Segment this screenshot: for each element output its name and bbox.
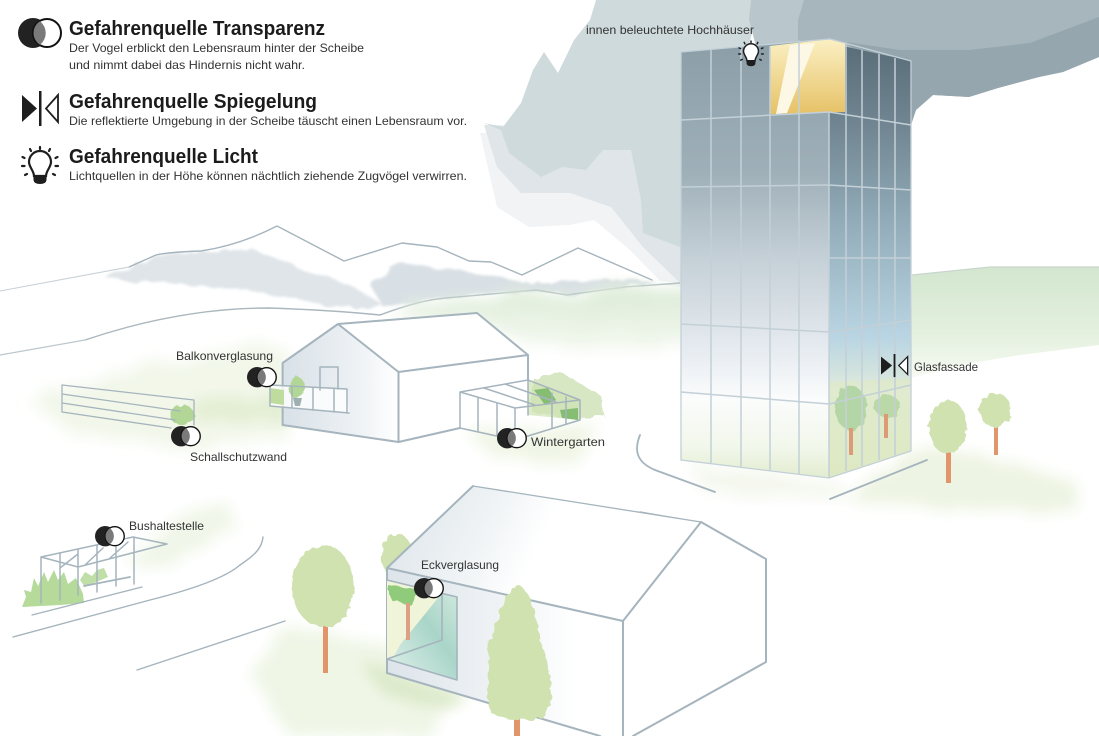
mountains	[0, 226, 680, 355]
roads	[13, 512, 697, 670]
text: Transparenz description	[69, 41, 364, 72]
reflection: lit top floor	[770, 39, 845, 114]
marker: Schallschutzwand	[171, 426, 287, 464]
marker: Wintergarten	[497, 428, 605, 449]
street lines at tower	[637, 435, 927, 499]
landscape: green watercolor patches	[30, 267, 1099, 736]
reflection: trees in facade	[829, 378, 911, 478]
house with balcony	[270, 313, 528, 442]
text: Transparenz description: Der Vogel erblickt den Lebensraum hinter der Scheibe	[69, 41, 364, 55]
marker: Schallschutzwand: Schallschutzwand	[190, 450, 287, 464]
marker: Bushaltestelle	[95, 519, 204, 546]
icon: Transparenz	[18, 18, 61, 48]
tower right face	[829, 43, 911, 478]
text: Spiegelung description: Die reflektierte Umgebung in der Scheibe täuscht einen Lebensraum vor.	[69, 114, 467, 128]
balcony glazing	[270, 367, 349, 413]
legend	[18, 18, 467, 184]
heading: Gefahrenquelle Transparenz: Gefahrenquelle Transparenz	[69, 18, 325, 40]
marker: Eckverglasung: Eckverglasung	[421, 558, 499, 572]
tower grid	[681, 39, 911, 478]
label: innen beleuchtete Hochhäuser: innen beleuchtete Hochhäuser	[586, 23, 754, 37]
winter garden	[460, 380, 580, 440]
bus stop	[22, 537, 167, 615]
tower: glass facade	[681, 39, 911, 478]
tower left face	[681, 39, 829, 478]
tree left	[292, 545, 354, 673]
label: Glasfassade: Glasfassade	[914, 360, 978, 374]
house with corner glazing	[387, 486, 766, 736]
marker: Balkonverglasung: Balkonverglasung	[176, 349, 273, 363]
icon: Spiegelung	[22, 91, 58, 126]
corner window	[387, 580, 457, 680]
sky: reflected clouds behind tower	[480, 0, 1099, 290]
heading: Gefahrenquelle Spiegelung: Gefahrenquelle Spiegelung	[69, 91, 317, 113]
trees right of tower	[929, 393, 1011, 483]
marker: Eckverglasung	[414, 558, 499, 598]
icon: mirror at facade	[881, 354, 908, 377]
noise protection wall	[62, 385, 194, 428]
text: Licht description: Lichtquellen in der Höhe können nächtlich ziehende Zugvögel verwirren.	[69, 169, 467, 183]
marker: Balkonverglasung	[176, 349, 276, 387]
icon: Licht	[22, 147, 58, 184]
heading: Gefahrenquelle Licht: Gefahrenquelle Licht	[69, 146, 258, 168]
marker: Bushaltestelle: Bushaltestelle	[129, 519, 204, 533]
marker: Wintergarten: Wintergarten	[531, 435, 605, 449]
icon: light bulb on tower	[739, 41, 763, 66]
tree behind corner house	[381, 534, 413, 578]
tree right of corner window	[488, 585, 551, 736]
text: Transparenz description: und nimmt dabei das Hindernis nicht wahr.	[69, 58, 305, 72]
